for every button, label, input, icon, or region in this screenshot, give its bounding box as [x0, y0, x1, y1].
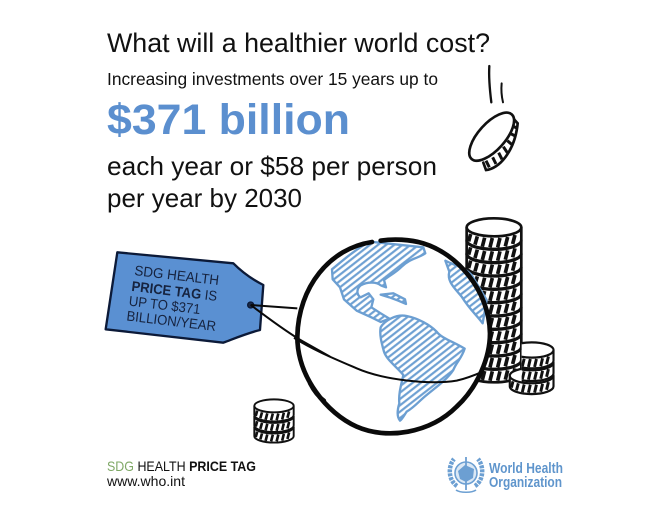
globe — [295, 240, 490, 433]
globe outline — [297, 240, 490, 433]
tag text: SDG HEALTH — [134, 262, 220, 288]
tag text: BILLION/YEAR — [126, 307, 217, 334]
organization name — [489, 461, 563, 491]
land: north america — [332, 242, 425, 322]
icon: small coin stack — [254, 399, 294, 443]
organization name: World Health — [489, 461, 563, 477]
icon: falling coin — [462, 66, 522, 170]
icon: tall coin stack — [467, 218, 521, 382]
tag strings — [251, 305, 330, 357]
land: caribbean — [381, 293, 406, 304]
icon: WHO emblem — [450, 457, 482, 492]
footer url: www.who.int — [106, 474, 185, 489]
text block: per person cost — [107, 151, 437, 213]
text block: per person cost: per year by 2030 — [107, 183, 302, 213]
land: africa edge — [445, 261, 487, 323]
title: What will a healthier world cost? — [107, 28, 490, 58]
tag text — [126, 262, 222, 334]
tag text: UP TO $371 — [128, 293, 202, 317]
string around globe — [295, 338, 483, 382]
headline figure: $371 billion — [107, 96, 350, 144]
icon: short coin stack — [510, 342, 554, 394]
price tag — [106, 252, 330, 357]
footer label: SDG HEALTH PRICE TAG — [107, 459, 256, 474]
land: south america — [380, 316, 465, 421]
subtitle: Increasing investments over 15 years up to — [107, 69, 438, 89]
text block: per person cost: each year or $58 per person — [107, 151, 437, 181]
tag text: PRICE TAG IS — [131, 278, 218, 304]
tag hole — [248, 302, 254, 308]
organization name: Organization — [489, 475, 562, 491]
